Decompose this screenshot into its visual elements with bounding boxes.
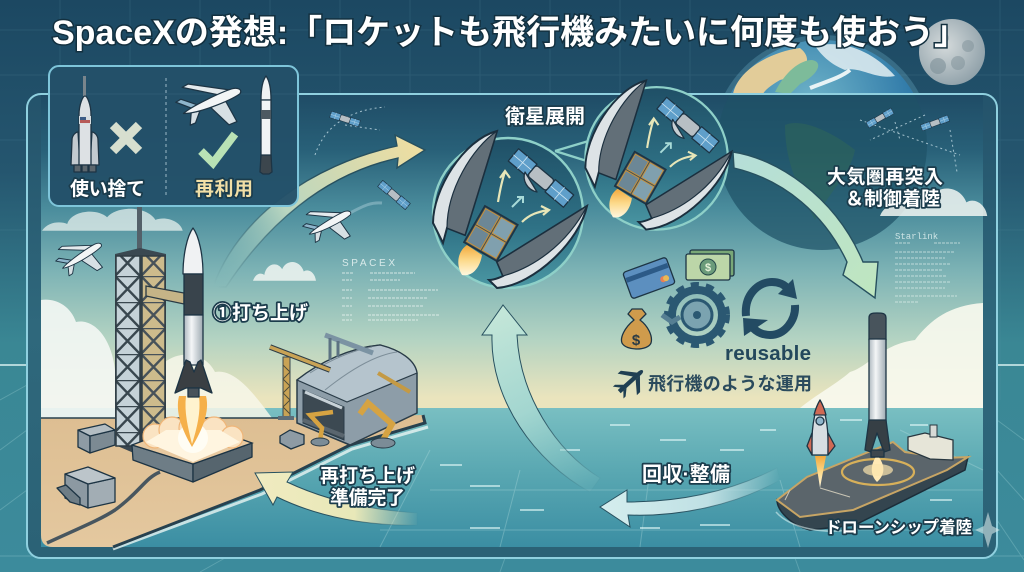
sea: [41, 408, 983, 547]
label: satellite deployment: 衛星展開: [505, 105, 585, 128]
bubble: satellite deployment right: [555, 80, 732, 230]
label: ready for re-launch: 再打ち上げ: [320, 465, 415, 487]
label: ready for re-launch: [320, 465, 415, 509]
arrow: return to launch: [482, 305, 600, 492]
arrow: launch to deployment: [213, 135, 425, 287]
legend panel: expendable vs reusable: [49, 66, 298, 206]
icon: reusable rocket: [260, 76, 272, 174]
icon: credit card: [623, 257, 675, 299]
icon: plane and operation text: 飛行機のような運用: [648, 374, 812, 394]
faint data: SpaceX panel: SPACEX: [342, 258, 395, 269]
arrow: recovery: [600, 468, 780, 527]
icon: moon: [919, 19, 985, 85]
label: re-entry and controlled landing: ＆制御着陸: [845, 188, 940, 210]
launch tower: [115, 206, 184, 456]
icon: check: [201, 134, 235, 163]
icon: reuse arrows: [743, 279, 797, 336]
label: drone ship landing: ドローンシップ着陸: [825, 517, 972, 537]
label: recovery and maintenance: 回収·整備: [642, 463, 730, 486]
label: reusable: 再利用: [195, 178, 253, 200]
icon: money bag: [622, 309, 651, 349]
orbit satellites: [51, 102, 960, 287]
label: re-entry and controlled landing: 大気圏再突入: [827, 166, 943, 188]
faint data: Starlink panel: Starlink: [895, 232, 938, 242]
icon: plane and operation text: [609, 360, 812, 403]
icon: banknotes: $: [705, 262, 711, 274]
label: re-entry and controlled landing: [827, 166, 943, 210]
label: ready for re-launch: 準備完了: [330, 487, 405, 509]
clouds: [41, 189, 987, 418]
arrow: ready for re-launch: [255, 472, 417, 525]
icon: earth: [725, 35, 919, 93]
arrow: re-entry: [733, 152, 878, 298]
label: expendable: 使い捨て: [70, 178, 145, 200]
hangar and cranes: [270, 335, 417, 449]
panel: main frame: [27, 94, 997, 558]
landed rocket: [863, 313, 893, 482]
icon: cross: [113, 125, 139, 151]
rocket on pad: [175, 228, 212, 397]
drone ship: [776, 425, 968, 531]
earth shadow through frame: [724, 123, 927, 250]
text: reusable: reusable: [725, 342, 811, 365]
launch pad with exhaust: [132, 396, 252, 482]
faint data: Starlink panel: [895, 232, 960, 302]
label: launch: ①打ち上げ: [213, 302, 308, 324]
icon: corner sparkle: [975, 512, 1000, 548]
title: SpaceXの発想:「ロケットも飛行機みたいに何度も使おう」: [52, 14, 968, 52]
icon: airliner: [171, 67, 251, 140]
icon: banknotes: [686, 250, 734, 280]
icon: gear: [662, 285, 727, 345]
ground buildings: [57, 424, 115, 508]
faint data: SpaceX panel: [342, 258, 440, 320]
icon: money bag: $: [632, 332, 641, 349]
small rocket: [807, 400, 835, 488]
ground: launch site: [41, 415, 428, 549]
icon: expendable rocket: [71, 76, 99, 172]
bubble: satellite deployment left: [433, 131, 587, 288]
